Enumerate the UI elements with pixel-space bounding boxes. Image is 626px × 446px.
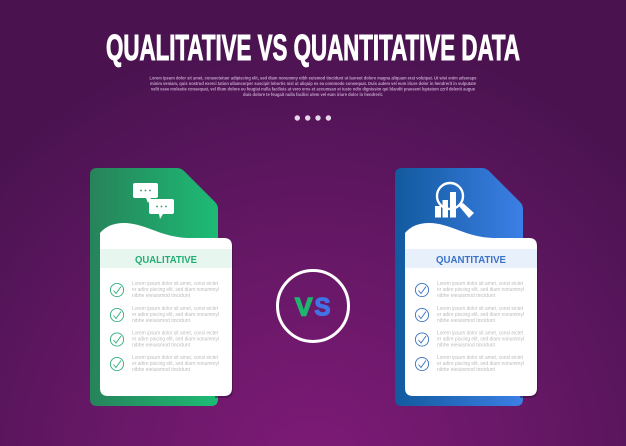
white card bbox=[405, 223, 537, 396]
checklist item 4: nibhe eieiuismod tincidunt bbox=[132, 367, 191, 373]
pagination dots bbox=[295, 115, 331, 121]
checklist item 2 bbox=[415, 306, 524, 324]
checklist item 2: nibhe eieiuismod tincidunt bbox=[437, 318, 496, 324]
card shadow bbox=[215, 243, 233, 398]
description text: velit esse molestie consequat, vel illum dolore eu feugiat nulla facilisis at vero eros et accumsan et iusto odio dignissim qui blandit praesent luptatum zzril delenit augue bbox=[151, 86, 475, 92]
checklist item 2: er adire piscing elit, sed diam nonummyl bbox=[437, 312, 524, 318]
heading band bbox=[100, 249, 232, 268]
heading band bbox=[405, 249, 537, 268]
checklist item 3 bbox=[415, 330, 524, 348]
checklist item 4: er adire piscing elit, sed diam nonummyl bbox=[132, 361, 219, 367]
card shadow bbox=[520, 243, 538, 398]
description text bbox=[150, 76, 477, 97]
checklist item 3: er adire piscing elit, sed diam nonummyl bbox=[132, 336, 219, 342]
green back card bbox=[90, 168, 218, 406]
heading band: QUANTITATIVE bbox=[436, 255, 506, 266]
checklist item 1 bbox=[415, 281, 524, 299]
checklist item 3: Lorem ipsum dolor sit amet, consi eictet bbox=[437, 330, 524, 336]
description text: duis dolore te feugait nulla facilisi ulem vel eum iriure dolor in hendrerit. bbox=[243, 92, 383, 97]
white card bbox=[100, 223, 232, 396]
checklist item 2: er adire piscing elit, sed diam nonummyl bbox=[132, 312, 219, 318]
checklist item 2 bbox=[110, 306, 219, 324]
checklist item 4: Lorem ipsum dolor sit amet, consi eictet bbox=[132, 355, 219, 361]
panel: qualitative bbox=[90, 168, 233, 406]
checklist item 3 bbox=[110, 330, 219, 348]
checklist item 1: er adire piscing elit, sed diam nonummyl bbox=[437, 287, 524, 293]
checklist item 2: Lorem ipsum dolor sit amet, consi eictet bbox=[132, 306, 219, 312]
checklist item 3: nibhe eieiuismod tincidunt bbox=[132, 342, 191, 348]
heading band: QUALITATIVE bbox=[135, 255, 197, 266]
vs badge bbox=[278, 270, 348, 342]
checklist item 1 bbox=[110, 281, 219, 299]
vs badge: V bbox=[295, 294, 313, 322]
checklist item 4 bbox=[110, 355, 219, 373]
checklist item 4 bbox=[415, 355, 524, 373]
checklist item 1: nibhe eieiuismod tincidunt bbox=[132, 293, 191, 299]
checklist item 2: nibhe eieiuismod tincidunt bbox=[132, 318, 191, 324]
icon: magnifier with bar chart bbox=[435, 183, 474, 218]
checklist item 3: er adire piscing elit, sed diam nonummyl bbox=[437, 336, 524, 342]
checklist item 1: Lorem ipsum dolor sit amet, consi eictet bbox=[132, 281, 219, 287]
checklist item 1: nibhe eieiuismod tincidunt bbox=[437, 293, 496, 299]
checklist item 4: Lorem ipsum dolor sit amet, consi eictet bbox=[437, 355, 524, 361]
icon: speech bubbles bbox=[133, 183, 174, 219]
checklist item 3: Lorem ipsum dolor sit amet, consi eictet bbox=[132, 330, 219, 336]
checklist item 4: nibhe eieiuismod tincidunt bbox=[437, 367, 496, 373]
description text: Lorem ipsum dolor sit amet, consectetuer adipiscing elit, sed diam nonummy nibh euismod tincidunt ut laoreet dolore magna aliquam erat volutpat. Ut wisi enim adserape bbox=[150, 76, 477, 80]
checklist item 1: er adire piscing elit, sed diam nonummyl bbox=[132, 287, 219, 293]
checklist item 4: er adire piscing elit, sed diam nonummyl bbox=[437, 361, 524, 367]
checklist item 1: Lorem ipsum dolor sit amet, consi eictet bbox=[437, 281, 524, 287]
checklist item 2: Lorem ipsum dolor sit amet, consi eictet bbox=[437, 306, 524, 312]
vs badge: S bbox=[314, 294, 330, 322]
panel: quantitative bbox=[395, 168, 538, 406]
blue back card bbox=[395, 168, 523, 406]
description text: minim veniam, quis nostrud exerci tation ullamcorper suscipit lobortis nisl ut aliquip ex ea commodo consequat. Duis autem vel eum iriure dolor in hendrerit in vulputate bbox=[150, 81, 476, 86]
checklist item 3: nibhe eieiuismod tincidunt bbox=[437, 342, 496, 348]
